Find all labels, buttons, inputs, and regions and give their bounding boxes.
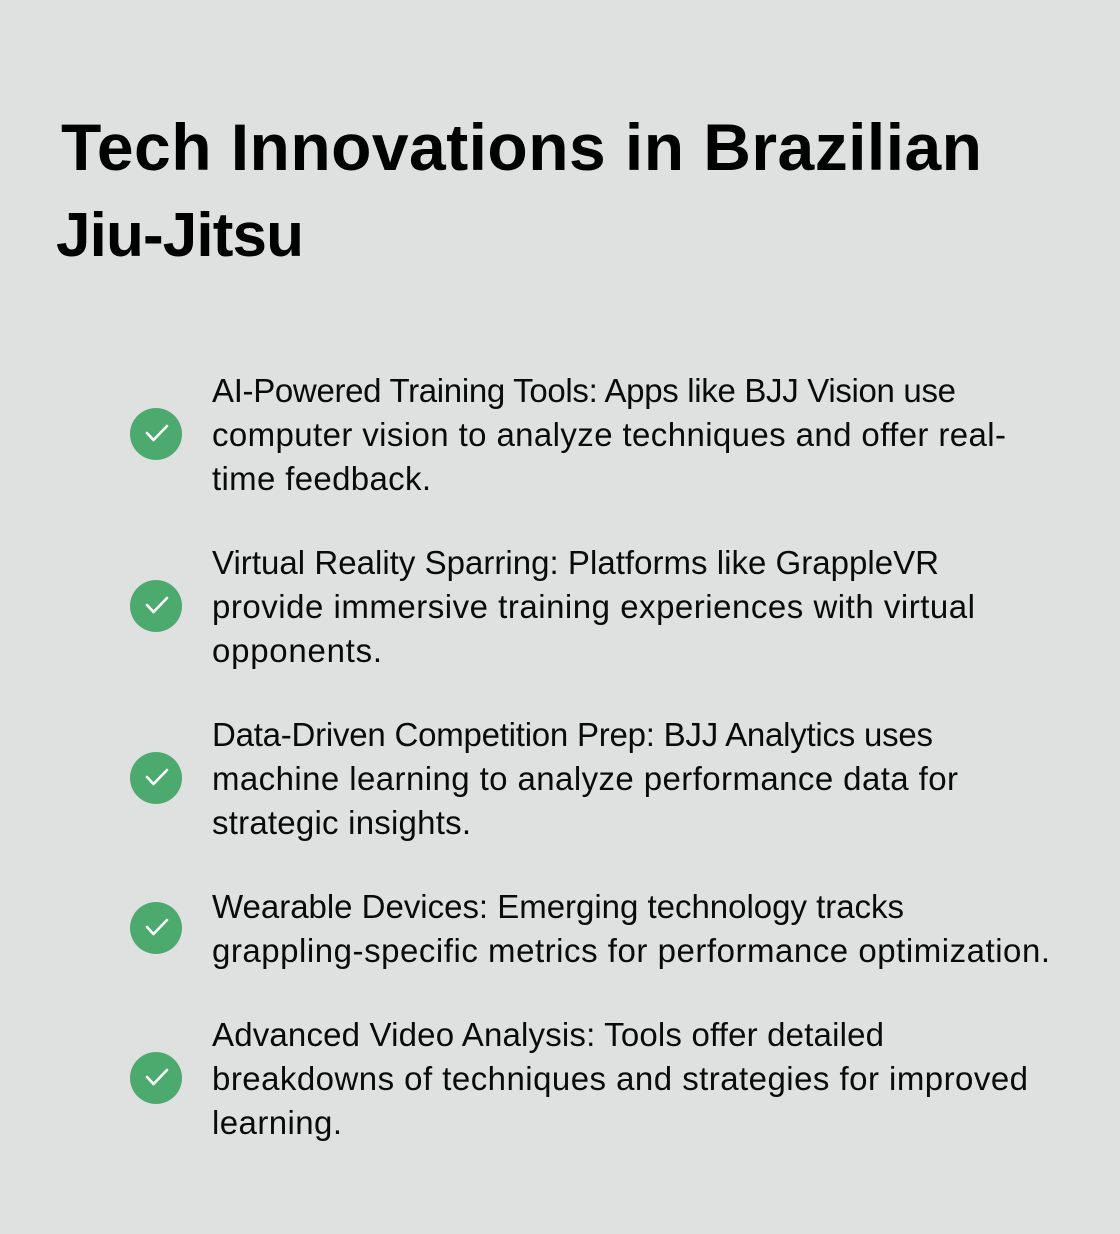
title: Jiu-Jitsu — [56, 201, 304, 270]
list item: data-driven competition prep — [130, 716, 958, 841]
icon: green check badge — [130, 408, 182, 460]
text: advanced video analysis: breakdowns of techniques and strategies for improved — [212, 1060, 1028, 1097]
title — [56, 110, 982, 270]
text: virtual reality sparring: opponents. — [212, 632, 382, 669]
text: data-driven competition prep — [212, 716, 958, 841]
list item: AI-powered training tools — [130, 372, 1006, 497]
text: AI-powered training tools: AI-Powered Training Tools: Apps like BJJ Vision use — [212, 372, 956, 409]
list item: advanced video analysis — [130, 1016, 1028, 1141]
text: advanced video analysis: Advanced Video Analysis: Tools offer detailed — [212, 1016, 884, 1053]
text: AI-powered training tools — [212, 372, 1006, 497]
text: wearable devices: Wearable Devices: Emerging technology tracks — [212, 888, 904, 925]
text: AI-powered training tools: time feedback. — [212, 460, 431, 497]
icon: green check badge — [130, 902, 182, 954]
text: virtual reality sparring — [212, 544, 975, 669]
text: virtual reality sparring: Virtual Reality Sparring: Platforms like GrappleVR — [212, 544, 939, 581]
text: data-driven competition prep: strategic insights. — [212, 804, 471, 841]
text: advanced video analysis — [212, 1016, 1028, 1141]
text: wearable devices — [212, 888, 1050, 969]
title: Tech Innovations in Brazilian — [61, 110, 982, 184]
list item: virtual reality sparring — [130, 544, 975, 669]
text: AI-powered training tools: computer vision to analyze techniques and offer real- — [212, 416, 1006, 453]
text: data-driven competition prep: Data-Driven Competition Prep: BJJ Analytics uses — [212, 716, 933, 753]
text: virtual reality sparring: provide immersive training experiences with virtual — [212, 588, 975, 625]
text: data-driven competition prep: machine learning to analyze performance data for — [212, 760, 958, 797]
icon: green check badge — [130, 752, 182, 804]
text: wearable devices: grappling-specific metrics for performance optimization. — [212, 932, 1050, 969]
text: advanced video analysis: learning. — [212, 1104, 342, 1141]
list item: wearable devices — [130, 888, 1050, 969]
icon: green check badge — [130, 1052, 182, 1104]
icon: green check badge — [130, 580, 182, 632]
